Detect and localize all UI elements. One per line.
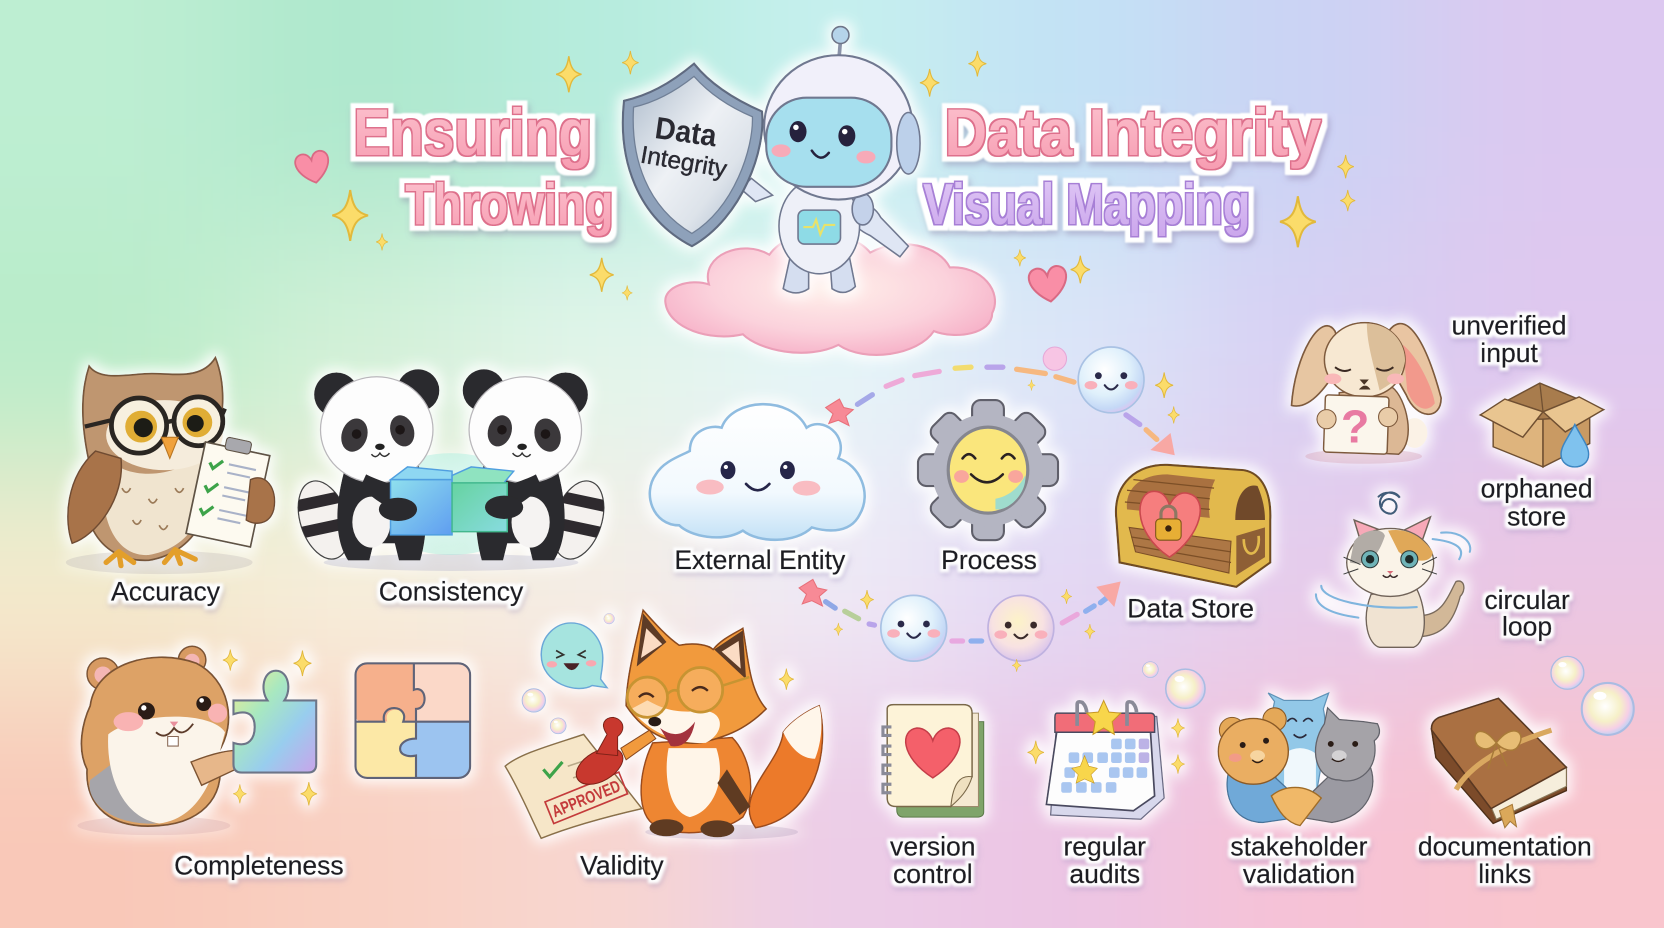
speech bubble with laughing face [541,623,607,689]
icon: version control notebook [883,705,984,817]
label: Accuracy: Accuracy [111,577,221,607]
four-piece rainbow jigsaw [356,663,470,778]
robot antenna [826,27,851,68]
label: Process: Process [941,545,1037,575]
title word: Data Integrity: Data Integrity [944,95,1322,169]
decorative soap bubbles [1142,656,1634,735]
robot chest screen [798,210,840,244]
label: orphaned store: store [1507,501,1566,531]
label: documentation links: links [1478,859,1531,889]
owl glasses and eyes [85,397,225,458]
label: regular audits: audits [1069,859,1140,889]
approved stamp text: APPROVED [549,777,623,821]
question sign [1323,395,1389,454]
label: orphaned store: orphaned [1481,474,1593,504]
character: owl with clipboard [66,358,275,574]
label: Completeness: Completeness [174,850,344,880]
fox body [641,738,751,833]
clipboard with checklist [186,433,272,547]
decorative sparkles and hearts around title [294,51,1355,304]
robot legs and body [741,178,908,293]
cubes [391,467,514,535]
label: documentation links: documentation [1418,831,1592,861]
fox tail [749,706,823,828]
shield: Integrity [638,142,730,183]
title word: Visual Mapping: Visual Mapping [923,173,1250,237]
character: fox with approved stamp [505,610,823,839]
label: regular audits: regular [1063,831,1146,861]
label: Data Store: Data Store [1127,594,1254,624]
shield [623,64,762,246]
label: External Entity: External Entity [674,545,846,575]
flow element: External Entity cloud [650,404,865,540]
character: hamster with puzzle [77,646,317,835]
fox head [626,610,766,743]
label: unverified input: unverified [1452,310,1567,340]
label: version control: version [890,831,976,861]
character: rabbit with question sign [1292,323,1441,464]
swirl motion lines and spiral [1316,492,1470,618]
pink cloud [665,233,995,355]
character: two pandas with cubes [286,369,616,571]
label: Consistency: Consistency [379,577,524,607]
flow element: Process gear [918,400,1058,540]
label: stakeholder validation: validation [1243,859,1355,889]
shield text: Data [653,110,720,154]
title word: Ensuring: Ensuring [353,95,592,169]
label: Validity: Validity [580,850,664,880]
icon: regular audits calendar [1028,700,1185,819]
arrow: upper dashed flow from cloud to data store [826,347,1180,455]
icon: empty cardboard box with droplet [1480,383,1604,467]
label: stakeholder validation: stakeholder [1230,831,1368,861]
arrow: lower dashed flow to data store [799,579,1121,672]
label: unverified input: input [1480,338,1538,368]
label: circular loop: circular [1484,585,1570,615]
approved scroll [505,734,642,838]
label: version control: control [893,859,973,889]
heart lock [1140,491,1200,557]
red stamp [570,717,656,792]
question sign: ? [1341,401,1369,453]
character: dizzy cat [1316,492,1470,647]
title word: Throwing: Throwing [405,173,613,237]
rainbow puzzle piece [233,671,316,773]
title: Ensuring Throwing Data Integrity Visual Mapping [353,95,1322,237]
icon: stakeholder friends shaking hands [1218,693,1380,826]
label: circular loop: loop [1502,612,1552,642]
icon: documentation book with ribbon [1431,698,1566,828]
robot head [764,55,920,200]
flow element: Data Store treasure chest [1116,465,1270,587]
robot with shield [623,27,920,293]
